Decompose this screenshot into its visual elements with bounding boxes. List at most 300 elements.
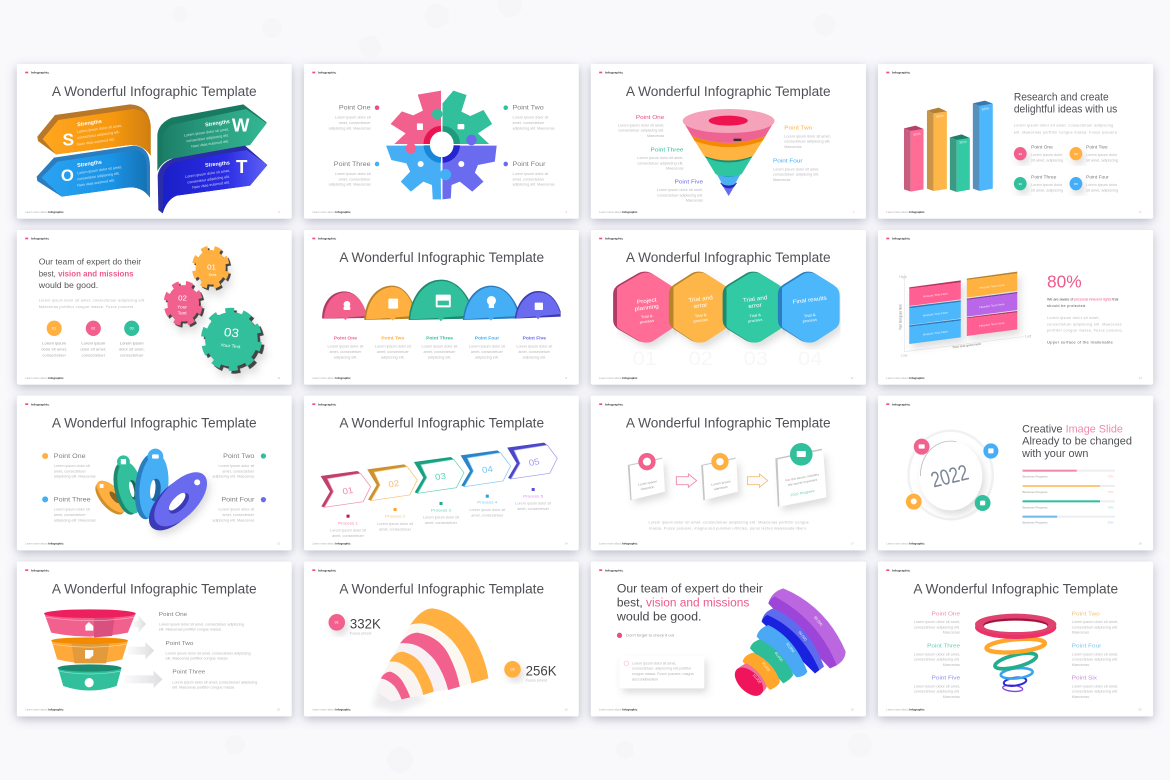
feature: green: dolor sit amet,	[119, 347, 145, 351]
label: Point Two: amet, consectetuer	[512, 121, 545, 125]
chevron 5: 05	[528, 457, 540, 468]
slide 16: spiral rings: Learn more about Infographic	[886, 708, 925, 712]
captions: adipiscing elit.	[334, 356, 357, 359]
right labels: Maecenas	[1072, 663, 1089, 667]
slide 11: three-tier funnel: Learn more about Infographic	[25, 708, 64, 712]
paragraph: Lorem ipsum dolor sit amet, consectetuer adipiscing elit.	[39, 299, 145, 302]
slide 11: three-tier funnel: 15	[277, 708, 281, 712]
label: Point One	[618, 115, 665, 138]
label: Point Four: amet, consectetuer	[222, 513, 255, 517]
dome green	[409, 280, 473, 321]
slide 5: gears and team text: Infographic	[31, 237, 49, 241]
stat: Point One: sit amet, adipiscing	[1031, 159, 1063, 162]
captions: amet, consectetuer	[471, 350, 504, 354]
ring orange	[90, 477, 132, 519]
process captions: amet, consectetuer	[379, 528, 412, 531]
label: Point One: Lorem ipsum dolor sit	[54, 464, 90, 468]
ghost numbers	[633, 348, 822, 370]
hexagon pink: Project	[637, 298, 657, 306]
paragraph	[39, 299, 145, 309]
stat 256K: Fusce pinsot	[526, 679, 547, 682]
arrow T: Lorem ipsum dolor sit amet,	[185, 169, 230, 179]
stat: Point Four: sit amet, adipiscing	[1086, 189, 1118, 192]
arcs	[381, 608, 488, 699]
feature: pink: consectetuer	[82, 353, 106, 357]
chevron 1: 01	[342, 485, 354, 496]
stat: Point One	[1014, 145, 1063, 162]
slide 6: domes	[304, 230, 579, 385]
progress 4	[1023, 516, 1115, 525]
slide 1: SWOT arrows	[17, 64, 292, 219]
slide 3: cone funnel: Learn more about Infographic	[599, 210, 638, 214]
process captions: amet, consectetuer	[332, 534, 365, 538]
process captions: Process 2	[385, 514, 406, 518]
paragraph: Lorem ipsum dolor sit amet, consectetuer adipiscing elit. Maecenas porttitor congue	[648, 521, 809, 524]
arrow S	[37, 104, 151, 156]
slide 3: cone funnel: A Wonderful Infographic Template	[626, 84, 831, 100]
slide 2: puzzle gear: 3	[566, 210, 568, 214]
left labels: Maecenas	[943, 695, 960, 699]
stat: Point Four: Lorem ipsum dolor	[1086, 183, 1118, 187]
arc shadow	[373, 683, 429, 712]
arrows	[124, 615, 163, 688]
feature: green: consectetuer	[120, 353, 144, 357]
label: Point One: amet, consectetuer	[54, 470, 87, 473]
slide 14: 2022 ring: Infographic	[892, 403, 911, 406]
stat: Point Three: 30	[1018, 182, 1022, 186]
tier orange	[51, 637, 128, 663]
block labels: Heavier Text Here	[979, 283, 1005, 290]
label: Point One: Lorem ipsum dolor sit amet, consectetuer adipiscing	[159, 623, 244, 626]
stat: Point One: 40	[1018, 152, 1022, 156]
slide 7: hexagons: Infographic	[605, 237, 623, 241]
feature: orange	[41, 321, 67, 357]
card 1	[628, 453, 665, 500]
stat 256K: 02	[510, 668, 515, 672]
left labels: Lorem ipsum dolor sit amet,	[914, 620, 960, 624]
right labels: Maecenas	[1072, 695, 1089, 699]
feature: green: 03	[130, 327, 134, 330]
axes: High	[899, 275, 907, 279]
hexagon green: Trial &	[749, 312, 762, 318]
stat: Point Four: 80	[1074, 182, 1078, 186]
tier pink	[44, 609, 136, 637]
feature: orange: 01	[52, 327, 56, 330]
slide 9: rings	[17, 396, 292, 550]
left labels: Point One	[932, 612, 961, 617]
card 1: obtention	[640, 485, 655, 491]
stat text: consectetuer adipiscing elit. Maecenas	[1047, 323, 1122, 326]
slide 1: SWOT arrows: Infographic	[31, 71, 49, 75]
captions: adipiscing elit.	[381, 356, 405, 359]
feature: orange: consectetuer	[42, 353, 67, 357]
label: Point Two	[784, 126, 831, 149]
slide 3: cone funnel: 7	[853, 210, 855, 214]
captions: Point Two	[381, 336, 404, 340]
progress 4: Business Progress	[1023, 521, 1048, 525]
slide 12: arcs with numbers	[304, 562, 579, 716]
arrow W	[157, 104, 267, 171]
chevron 4	[461, 450, 511, 487]
label: Point Three: adipiscing elit. Maecenas	[54, 519, 96, 522]
slide 16: spiral rings: A Wonderful Infographic Template	[913, 581, 1118, 597]
dome blue	[463, 286, 519, 321]
stat text: 80%	[1047, 271, 1082, 291]
captions: amet, consectetuer	[329, 350, 362, 354]
slide 4: 3D bars: Learn more about Infographic	[886, 210, 925, 214]
stacked cone	[730, 588, 846, 701]
slide 16: spiral rings: 20	[1138, 708, 1142, 712]
heading: Research and create	[1014, 91, 1109, 103]
right labels: Lorem ipsum dolor sit amet,	[1072, 653, 1118, 656]
captions	[327, 336, 552, 359]
slide 15: stacked cone: 19	[851, 708, 854, 712]
slide 2: puzzle gear: Infographic	[318, 71, 337, 75]
ring dial: 2022	[928, 460, 971, 492]
left labels: consectetuer adipiscing elit.	[914, 626, 960, 629]
process captions: Lorem ipsum dolor sit	[423, 516, 459, 520]
captions: amet, consectetuer	[377, 350, 410, 354]
slide 5: gears and team text: Learn more about Infographic	[25, 376, 64, 380]
slide 9: rings: 13	[277, 542, 281, 546]
gear piece: pink	[391, 91, 443, 144]
captions: Point Three	[426, 336, 453, 340]
ghost numbers: 03	[744, 348, 768, 370]
progress 1: Business Progress	[1023, 475, 1048, 479]
hexagon blue: Trial &	[803, 312, 816, 318]
slide 4: 3D bars	[878, 64, 1153, 219]
paragraph: massa. Fusce posuere, magna sed pulvinar ultricies, purus lectus malesuada libero.	[649, 527, 807, 530]
label: Point Four: Maecenas	[773, 178, 791, 182]
arrow O	[37, 146, 150, 198]
left labels: Maecenas	[943, 631, 960, 635]
hexagon blue: process	[802, 317, 817, 323]
dome purple	[515, 291, 561, 319]
ring icons	[906, 439, 998, 511]
axes: Your text goes here	[899, 304, 903, 330]
axes: Low	[901, 354, 908, 357]
label: Point One: Point One	[54, 453, 86, 460]
hexagon green: Trial and	[743, 295, 768, 304]
slide 1: SWOT arrows: A Wonderful Infographic Template	[52, 84, 257, 100]
gear 01	[193, 247, 230, 290]
gear 03: 03	[223, 325, 240, 340]
process captions: Lorem ipsum dolor sit	[330, 529, 366, 533]
feature: green	[119, 321, 145, 357]
axes: Your text goes here	[952, 342, 982, 349]
bar pink: 40%	[913, 132, 922, 137]
gear 03: Your Text	[220, 343, 241, 349]
label: Point One: Point One	[636, 115, 665, 121]
process captions: Process 5	[523, 494, 544, 498]
label: Point Two: Point Two	[223, 453, 255, 460]
gear 01: 01	[207, 263, 216, 271]
stat: Point Two: 60	[1074, 152, 1078, 156]
label: Point Three	[42, 496, 96, 522]
stat: Point Three: sit amet, adipiscing	[1031, 189, 1063, 192]
stat: Point Three: Point Three	[1031, 175, 1057, 180]
feature: pink: dolor sit amet,	[80, 347, 106, 351]
progress 3: 75%	[1108, 506, 1114, 509]
arrow O: O	[61, 166, 74, 185]
note card	[620, 656, 704, 688]
label: Point One: Lorem ipsum dolor sit	[335, 116, 371, 120]
arrow T: Nam vitae euismod elit.	[192, 180, 230, 190]
arrow T: T	[236, 156, 248, 177]
slide 13: cards and arrows	[591, 396, 866, 550]
arrow W: Nam vitae euismod elit.	[191, 139, 229, 149]
chevron 1	[321, 471, 371, 507]
label: Point Three: Maecenas	[666, 167, 684, 171]
stat: Point Four: Point Four	[1086, 175, 1109, 180]
arrow O: Strengths	[77, 160, 102, 169]
label: Point Five	[657, 180, 704, 203]
label: Point Four: consectetuer adipiscing elit.	[773, 173, 819, 177]
stat text: porttitor congue massa. Fusce posuere,	[1047, 329, 1123, 333]
slide 12: arcs with numbers: 16	[564, 708, 568, 712]
heading: with your own	[1021, 448, 1088, 460]
process captions	[330, 488, 551, 538]
feature: pink: 02	[91, 327, 95, 330]
right labels	[1072, 612, 1118, 699]
slide 14: 2022 ring: Learn more about Infographic	[886, 542, 925, 546]
gear 02: 02	[178, 294, 187, 303]
stat 332K	[328, 614, 381, 635]
slide 13: cards and arrows: Learn more about Infographic	[599, 542, 638, 546]
hexagon orange: error	[694, 303, 708, 310]
arrow S: S	[63, 130, 74, 150]
right labels: Lorem ipsum dolor sit amet,	[1072, 620, 1118, 624]
block labels: Heavier Text Here	[923, 292, 949, 298]
slide 16: spiral rings: Infographic	[892, 569, 911, 572]
ghost numbers: 02	[689, 348, 713, 370]
slide 14: 2022 ring	[878, 396, 1153, 550]
label: Point Four: adipiscing elit. Maecenas	[512, 183, 555, 187]
slide 1: SWOT arrows: 9	[278, 210, 280, 214]
arrow S: Lorem ipsum dolor sit amet,	[77, 124, 122, 134]
slide 2: puzzle gear: Learn more about Infographic	[312, 210, 351, 214]
captions: amet, consectetuer	[518, 350, 551, 354]
slide 11: three-tier funnel	[17, 562, 292, 716]
slide 14: 2022 ring: 18	[1138, 542, 1142, 546]
label: Point Four: amet, consectetuer	[512, 178, 545, 181]
heading	[616, 581, 763, 623]
hexagon pink: Trial &	[641, 313, 653, 319]
process captions: Process 1	[338, 521, 359, 525]
slide 3: cone funnel: Infographic	[605, 71, 623, 75]
label: Point Three: Lorem ipsum dolor sit	[54, 508, 90, 512]
bar green: 30%	[959, 140, 968, 145]
hexagon orange: process	[693, 317, 708, 323]
arrow T: Strengths	[205, 160, 230, 169]
slide 10: chevron process: A Wonderful Infographic Template	[339, 415, 544, 431]
slide 8: isometric blocks	[878, 230, 1153, 385]
process captions: Process 4	[477, 500, 498, 505]
arrow O: Lorem ipsum dolor sit amet,	[77, 165, 122, 175]
card 2: Lorem ipsum	[711, 479, 731, 487]
label: Point One: adipiscing elit. Maecenas	[329, 127, 371, 130]
stacked cone: 60,000	[797, 630, 807, 642]
stat text: should be protected.	[1047, 304, 1086, 308]
arrow orange	[747, 474, 768, 487]
hexagon green	[736, 283, 772, 331]
stat text	[1047, 271, 1123, 345]
left labels: consectetuer adipiscing elit.	[914, 658, 960, 662]
stat 256K	[504, 661, 557, 682]
stat: Point Two: Point Two	[1086, 145, 1108, 150]
slide 6: domes: Infographic	[318, 237, 337, 241]
chevron 3: 03	[434, 471, 447, 482]
process captions: Process 3	[431, 508, 452, 512]
card 3: For the sector, industry	[785, 472, 820, 482]
heading: best, vision and missions	[617, 595, 750, 609]
card 2	[701, 453, 738, 500]
right labels: Point Six	[1072, 676, 1097, 682]
quadrant: bottom-right slides	[591, 396, 1153, 716]
bar blue	[973, 101, 993, 191]
captions: Lorem ipsum dolor sit	[422, 345, 457, 349]
bar green	[950, 134, 970, 192]
paragraph	[648, 521, 809, 530]
bar blue: 80%	[981, 107, 990, 112]
bar orange	[927, 108, 947, 191]
chevron 4: 04	[481, 464, 494, 475]
slide 10: chevron process: 14	[564, 542, 568, 546]
stat: Point Two	[1070, 145, 1118, 162]
stat 256K: 256K	[526, 663, 557, 679]
slide 9: rings: A Wonderful Infographic Template	[52, 415, 257, 431]
chevron 2	[367, 464, 417, 501]
process captions: amet, consectetuer	[471, 514, 504, 517]
stat: Point Two: sit amet, adipiscing	[1086, 159, 1118, 162]
captions: adipiscing elit.	[475, 356, 499, 359]
progress 3: Business Progress	[1023, 506, 1048, 509]
progress 1: 75%	[1108, 475, 1114, 479]
slide 12: arcs with numbers: Learn more about Infographic	[312, 708, 351, 712]
left labels: Point Five	[932, 676, 961, 682]
captions: Point Five	[523, 336, 546, 340]
captions: Point Four	[475, 336, 499, 340]
card 2: elements	[714, 485, 728, 491]
label: Point Five: Point Five	[675, 180, 704, 186]
heading: Already to be changed	[1022, 435, 1132, 447]
feature: pink	[80, 321, 106, 357]
label: Point One: Lorem ipsum dolor sit amet,	[618, 124, 664, 127]
gear 01: Text	[208, 272, 217, 277]
stat 332K: 01	[335, 621, 339, 625]
note card: congue massa. Fusce posuere, magna	[632, 672, 694, 676]
left labels: Lorem ipsum dolor sit amet,	[914, 685, 960, 688]
arrow W: consectetur adipiscing elit.	[186, 133, 229, 143]
label: Point Four: Lorem ipsum dolor sit	[218, 508, 254, 512]
progress 1	[1023, 470, 1115, 479]
label: Point Three: elit. Maecenas porttitor congue massa	[172, 686, 234, 690]
blocks left column	[909, 280, 961, 344]
hexagon blue	[791, 283, 827, 331]
heading: Our team of expert do their	[617, 581, 763, 595]
ring dial	[908, 431, 993, 519]
arrow S: Strengths	[77, 119, 102, 128]
progress 3	[1023, 500, 1115, 509]
slide 8: isometric blocks: 12	[1139, 376, 1142, 380]
slide 10: chevron process: Infographic	[318, 403, 337, 406]
captions: Lorem ipsum dolor sit	[375, 345, 411, 349]
stat: Point Three: Lorem ipsum dolor	[1031, 183, 1063, 187]
block labels	[923, 283, 1005, 336]
hexagon orange: Trial and	[688, 295, 713, 304]
hexagon orange	[682, 283, 717, 331]
slide 16: spiral rings	[878, 562, 1153, 716]
left labels	[914, 612, 961, 699]
slide 12: arcs with numbers: A Wonderful Infographic Template	[339, 581, 544, 597]
label: Point Four	[773, 159, 819, 182]
label: Point Five: consectetuer adipiscing elit.	[657, 194, 703, 197]
stat 332K: Fusce pinsot	[350, 632, 371, 635]
card 1: Lorem ipsum	[638, 479, 658, 487]
label: Point One	[329, 105, 379, 130]
label: Point Four: adipiscing elit. Maecenas	[212, 519, 255, 522]
label: Point Three	[329, 161, 379, 187]
gear piece: lavender	[440, 135, 497, 199]
label: Point Four: Lorem ipsum dolor sit amet,	[773, 168, 819, 171]
left labels: Lorem ipsum dolor sit amet,	[914, 653, 960, 656]
label: Point Two: amet, consectetuer	[222, 470, 255, 473]
slide 2: puzzle gear	[304, 64, 579, 219]
slide 13: cards and arrows: A Wonderful Infographic Template	[626, 415, 831, 431]
stat text: Upper surface of the Inalienable	[1047, 340, 1113, 345]
right labels: Lorem ipsum dolor sit amet,	[1072, 685, 1118, 688]
slide 13: cards and arrows: Infographic	[605, 403, 623, 406]
process captions: amet, consectetuer	[425, 521, 458, 525]
label: Point Four	[503, 161, 555, 187]
label: Point Four: Point Four	[221, 497, 255, 503]
arrow O: Nam vitae euismod elit.	[77, 178, 115, 188]
gear 02	[165, 283, 203, 326]
captions: amet, consectetuer	[424, 350, 456, 354]
gear piece: green	[443, 91, 492, 144]
heading: best, vision and missions	[39, 269, 134, 278]
chevron 3	[414, 457, 464, 493]
label: Point Two: adipiscing elit. Maecenas	[512, 127, 555, 130]
slide 11: three-tier funnel: Infographic	[31, 569, 49, 572]
right labels: consectetuer adipiscing elit.	[1072, 658, 1118, 662]
captions: adipiscing elit.	[523, 356, 546, 359]
heading: would be good.	[616, 609, 702, 623]
note card: consectetuer, adipiscing elit porttitor	[632, 667, 692, 671]
spiral	[975, 614, 1056, 692]
hexagon orange: Trial &	[694, 312, 707, 318]
label: Point Two: consectetuer adipiscing elit.	[784, 140, 830, 144]
gear piece: blue	[386, 143, 441, 199]
right labels: Point Two	[1072, 612, 1100, 617]
feature: orange: Lorem ipsum	[42, 341, 66, 345]
quadrant: top-left slides	[17, 64, 579, 385]
label: Point Four	[212, 497, 266, 522]
slide 5: gears and team text: 11	[277, 376, 281, 380]
arrow T: consectetur adipiscing elit.	[187, 175, 230, 185]
hexagon pink: process	[639, 318, 654, 324]
progress 2	[1023, 485, 1115, 494]
label: Point Five: Lorem ipsum dolor sit amet,	[657, 188, 703, 192]
label: Point Two: Point Two	[512, 105, 544, 112]
label: Point Four: Point Four	[773, 159, 802, 165]
captions: Lorem ipsum dolor sit	[327, 345, 363, 349]
heading	[1014, 91, 1117, 115]
left labels: Point Three	[927, 644, 961, 650]
heading: Our team of expert do their	[39, 257, 141, 267]
label: Point One: amet, consectetuer	[339, 121, 371, 125]
ghost numbers: 01	[633, 348, 657, 370]
